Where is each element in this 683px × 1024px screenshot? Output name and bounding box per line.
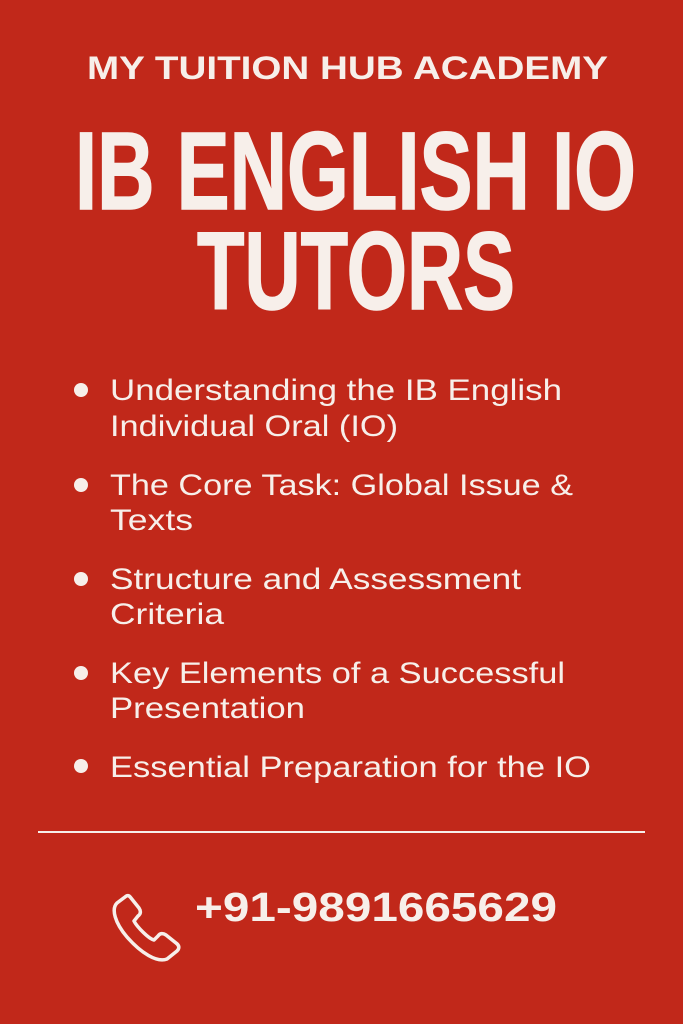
bullet 1 (74, 374, 562, 443)
bullet 5: Essential Preparation for the IO (110, 751, 591, 784)
bullet 2: The Core Task: Global Issue & (110, 469, 573, 502)
bullet 2: Texts (110, 504, 193, 537)
bullet 3: Criteria (110, 598, 224, 631)
bullet 1: Understanding the IB English (110, 374, 562, 407)
heading: academy name: MY TUITION HUB ACADEMY (87, 50, 608, 86)
bullet 3: Structure and Assessment (110, 563, 522, 596)
bullet list (74, 374, 591, 784)
title: TUTORS (197, 210, 515, 333)
bullet 4 (74, 657, 565, 725)
phone number: +91-9891665629 (195, 884, 557, 930)
title (75, 110, 636, 333)
bullet 4: Presentation (110, 692, 305, 725)
bullet 2 (74, 469, 573, 537)
icon: phone (114, 896, 179, 960)
bullet 1: Individual Oral (IO) (110, 410, 398, 443)
bullet 4: Key Elements of a Successful (110, 657, 565, 690)
bullet 3 (74, 563, 522, 631)
